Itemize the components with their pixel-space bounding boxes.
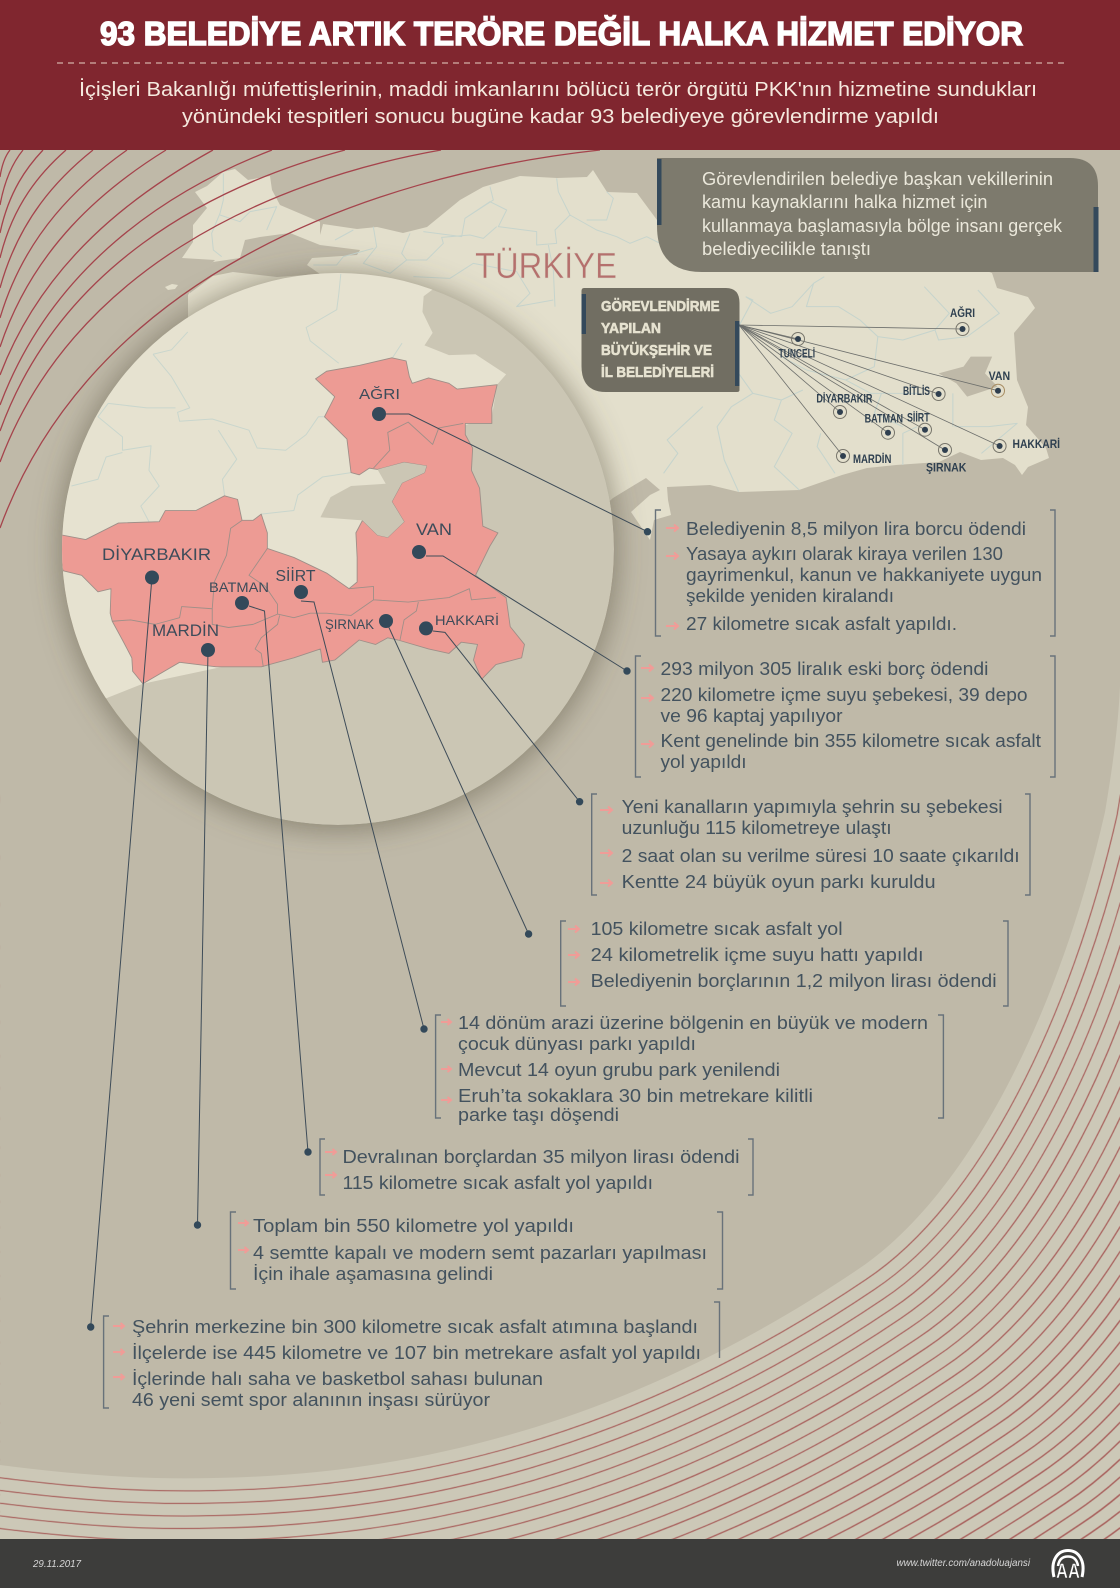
small map labels: SİİRT: [907, 412, 930, 425]
panel: Mardin facts: Toplam bin 550 kilometre yol yapıldı: [253, 1215, 574, 1236]
circle land: [62, 273, 506, 698]
callout: görevlendirilen: belediyecilikle tanıştı: [702, 238, 871, 259]
panel: Şırnak facts: Belediyenin borçlarının 1,2 milyon lirası ödendi: [591, 970, 997, 991]
twitter address: www.twitter.com/anadoluajansi: [896, 1558, 1031, 1569]
panel: Hakkari facts: [592, 794, 1030, 895]
small island: [165, 284, 178, 290]
light curved band, bottom right: [0, 686, 1120, 1540]
panel: Van facts: 220 kilometre içme suyu şebekesi, 39 depo: [660, 684, 1028, 705]
panel: Ağrı facts: [656, 510, 1055, 636]
small map markers: [792, 322, 1006, 462]
red concentric lines, top left: [0, 150, 600, 528]
panel: Mardin facts: İçin ihale aşamasına gelindi: [253, 1263, 493, 1284]
Lake Van, small map: [939, 357, 997, 397]
small map labels: ŞIRNAK: [926, 463, 967, 475]
callout: görevlendirilen: kamu kaynaklarını halka hizmet için: [702, 191, 988, 212]
province labels in circle: BATMAN: [209, 579, 269, 595]
callout: görevlendirilen: [657, 158, 1098, 272]
small map labels: TUNCELİ: [779, 348, 815, 361]
panel: Diyarbakır facts: İçlerinde halı saha ve basketbol sahası bulunan: [132, 1368, 543, 1389]
small map labels: VAN: [989, 371, 1010, 383]
small map labels: HAKKARİ: [1012, 438, 1060, 451]
panel: Batman facts: [320, 1139, 753, 1195]
panel: Van facts: ve 96 kaptaj yapılıyor: [660, 705, 842, 726]
small map labels: BİTLİS: [903, 385, 930, 398]
callout: görevlendirilen: Görevlendirilen belediye başkan vekillerinin: [702, 168, 1053, 189]
panel: Van facts: yol yapıldı: [660, 751, 746, 772]
Marmara sea: [188, 233, 360, 293]
subtitle: İçişleri Bakanlığı müfettişlerinin, maddi imkanlarını bölücü terör örgütü PKK'nın hizmetine sundukları: [79, 78, 1037, 101]
panel: Siirt facts: [436, 1012, 943, 1125]
panel: Diyarbakır facts: [104, 1302, 720, 1410]
lake Van: [320, 462, 427, 537]
callout: görevlendirme yapılan: YAPILAN: [601, 320, 661, 337]
callout: görevlendirme yapılan: BÜYÜKŞEHİR VE: [601, 342, 712, 359]
panel: Van facts: 293 milyon 305 liralık eski borç ödendi: [660, 658, 988, 679]
panel: Siirt facts: Mevcut 14 oyun grubu park yenilendi: [458, 1059, 780, 1080]
panel: Mardin facts: 4 semtte kapalı ve modern semt pazarları yapılması: [253, 1242, 707, 1263]
panel: Hakkari facts: Kentte 24 büyük oyun parkı kuruldu: [622, 871, 936, 892]
pink provinces: [57, 358, 524, 684]
icon: AA logo: [1053, 1550, 1083, 1583]
title "TÜRKİYE": TÜRKİYE: [475, 245, 617, 286]
callout: görevlendirilen: kullanmaya başlamasıyla bölge insanı gerçek: [702, 215, 1063, 236]
red concentric lines, bottom right: [0, 600, 1120, 1540]
panel: Mardin facts: [230, 1212, 722, 1289]
panel: Ağrı facts: 27 kilometre sıcak asfalt yapıldı.: [686, 613, 957, 634]
panel: Şırnak facts: 105 kilometre sıcak asfalt yol: [591, 918, 843, 939]
province borders, east: [664, 277, 1017, 492]
leader lines: [91, 414, 647, 1327]
panel: Batman facts: Devralınan borçlardan 35 milyon lirası ödendi: [342, 1146, 740, 1167]
province labels in circle: AĞRI: [359, 386, 400, 403]
panel: Diyarbakır facts: 46 yeni semt spor alanının inşası sürüyor: [132, 1389, 490, 1410]
panel: Van facts: Kent genelinde bin 355 kilometre sıcak asfalt: [660, 730, 1041, 751]
small map labels: DİYARBAKIR: [816, 393, 873, 406]
callout: görevlendirme yapılan: [582, 288, 740, 392]
callout: görevlendirme yapılan: İL BELEDİYELERİ: [601, 364, 714, 381]
small map connection lines: [739, 325, 1000, 456]
date: 29.11.2017: [32, 1559, 81, 1570]
small map labels: MARDİN: [853, 453, 891, 466]
panel: Siirt facts: 14 dönüm arazi üzerine bölgenin en büyük ve modern: [458, 1012, 928, 1033]
panel: Ağrı facts: Yasaya aykırı olarak kiraya verilen 130: [686, 543, 1003, 564]
panel: Diyarbakır facts: İlçelerde ise 445 kilometre ve 107 bin metrekare asfalt yol yapıldı: [132, 1342, 701, 1363]
magnified map circle: [62, 273, 614, 825]
province labels in circle: [102, 386, 499, 640]
panel: Hakkari facts: 2 saat olan su verilme süresi 10 saate çıkarıldı: [622, 845, 1020, 866]
panel: Van facts: [636, 656, 1055, 777]
province labels in circle: MARDİN: [152, 621, 219, 640]
province labels in circle: ŞIRNAK: [325, 617, 374, 632]
province labels in circle: SİİRT: [276, 566, 316, 585]
inner province borders: [112, 422, 496, 667]
map: Turkey land: [165, 169, 1049, 600]
small map labels: [779, 307, 1060, 475]
title: 93 BELEDİYE ARTIK TERÖRE DEĞİL HALKA HİZMET EDİYOR: [100, 15, 1023, 52]
province labels in circle: VAN: [416, 520, 452, 539]
header band: yönündeki tespitleri sonucu bugüne kadar 93 belediyeye görevlendirme yapıldı: [182, 106, 939, 128]
panel: Batman facts: 115 kilometre sıcak asfalt yol yapıldı: [342, 1172, 653, 1193]
panel: Ağrı facts: şekilde yeniden kiralandı: [686, 585, 894, 606]
header band: [0, 0, 1120, 150]
panel: Hakkari facts: Yeni kanalların yapımıyla şehrin su şebekesi: [622, 796, 1003, 817]
small map labels: BATMAN: [865, 413, 903, 425]
panel: Şırnak facts: [561, 918, 1008, 1006]
circle province borders: [71, 274, 402, 522]
footer band: [0, 1539, 1120, 1588]
panel: Hakkari facts: uzunluğu 115 kilometreye ulaştı: [622, 817, 892, 838]
province labels in circle: DİYARBAKIR: [102, 545, 211, 564]
province labels in circle: HAKKARİ: [435, 611, 499, 628]
panel: Siirt facts: parke taşı döşendi: [458, 1104, 619, 1125]
panel: Şırnak facts: 24 kilometrelik içme suyu hattı yapıldı: [591, 944, 924, 965]
panel: Siirt facts: çocuk dünyası parkı yapıldı: [458, 1033, 696, 1054]
leader end dots: [87, 528, 651, 1331]
map dots: [145, 407, 433, 657]
panel: Ağrı facts: gayrimenkul, kanun ve hakkaniyete uygun: [686, 564, 1042, 585]
callout: görevlendirme yapılan: GÖREVLENDİRME: [601, 298, 720, 315]
panel: Diyarbakır facts: Şehrin merkezine bin 300 kilometre sıcak asfalt atımına başlandı: [132, 1316, 698, 1337]
circle shadow: [57, 270, 619, 832]
panel: Siirt facts: Eruh’ta sokaklara 30 bin metrekare kilitli: [458, 1085, 813, 1106]
province borders, north-west: [212, 173, 667, 307]
small map labels: AĞRI: [950, 307, 975, 320]
icon: AA logo: AA: [1056, 1560, 1080, 1583]
panel: Ağrı facts: Belediyenin 8,5 milyon lira borcu ödendi: [686, 518, 1026, 539]
